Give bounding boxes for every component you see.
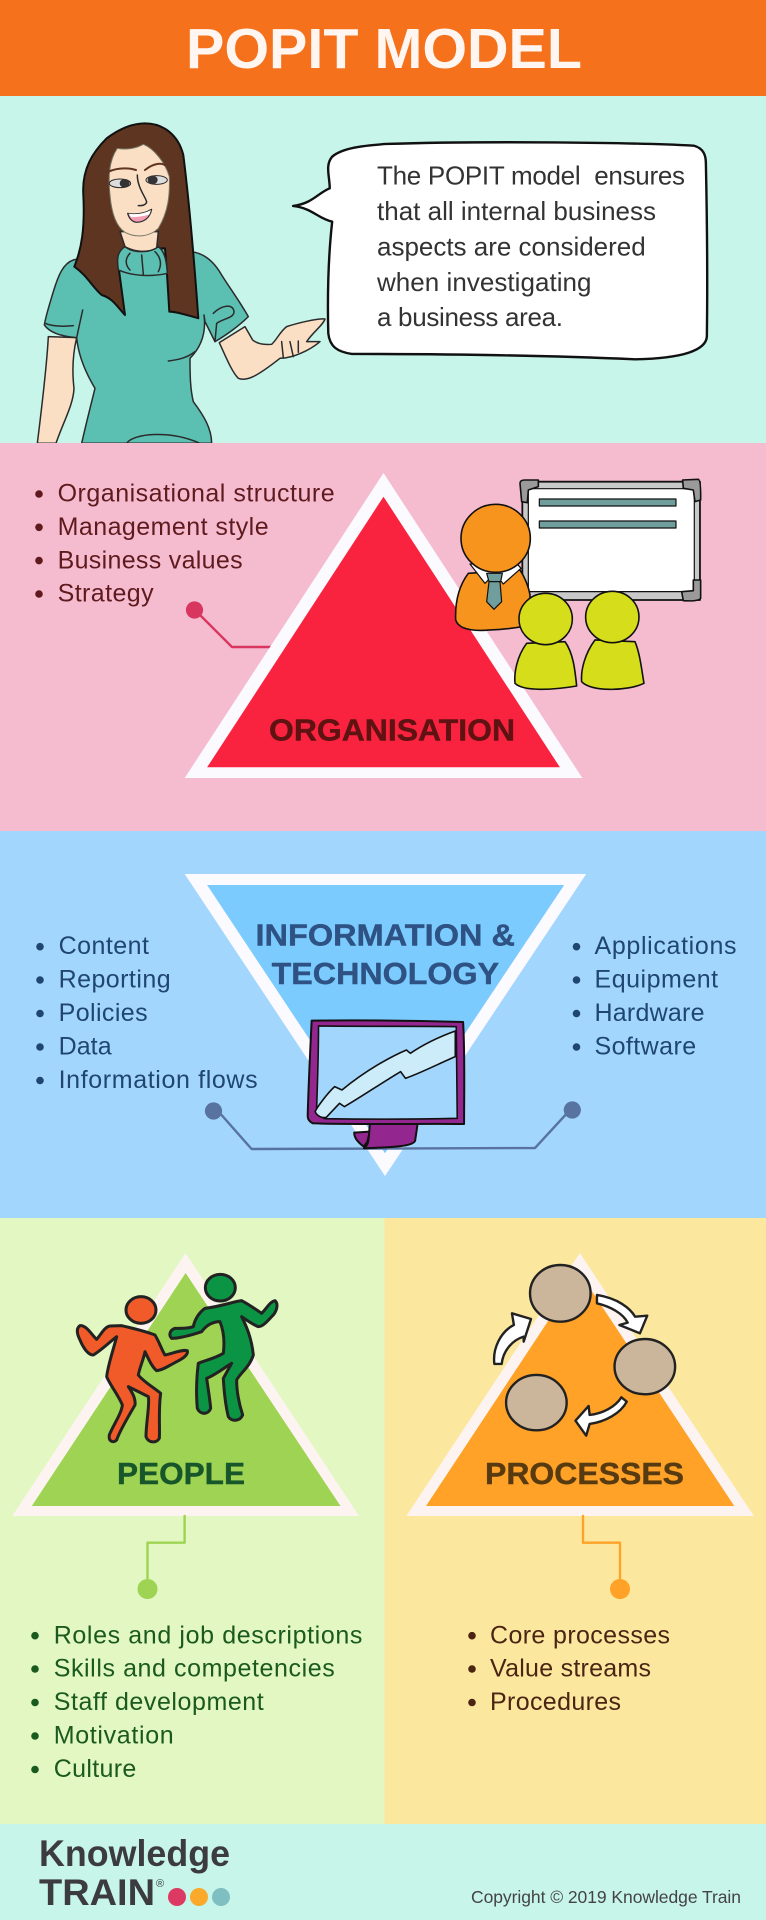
bullet list: information: Data [59, 1032, 112, 1060]
triangle: processes [406, 1253, 754, 1516]
bullet list: information: Content [59, 932, 149, 960]
bullet list: technology: Hardware [594, 999, 704, 1027]
bullet list: people: Culture [54, 1755, 136, 1783]
triangle: organisation [185, 473, 582, 778]
icon: dancing people [77, 1274, 277, 1442]
bullet list: processes: Core processes [490, 1621, 670, 1649]
panel: processes [384, 1218, 766, 1824]
bullet list: technology: Software [594, 1032, 696, 1060]
bullet list: processes: Procedures [490, 1688, 621, 1716]
logo: Knowledge Train [39, 1833, 230, 1913]
speech text: aspects are considered [377, 232, 646, 262]
bullet list: people: Roles and job descriptions [54, 1621, 362, 1649]
bullet list: technology [573, 932, 736, 1060]
title: POPIT MODEL [186, 17, 582, 81]
icon: process cycle [494, 1265, 675, 1436]
connector: processes [583, 1516, 630, 1599]
bullet list: technology: Equipment [594, 966, 718, 994]
connector: information and technology [205, 1101, 581, 1149]
panel: organisation [0, 443, 766, 831]
bullet list: organisation: Strategy [58, 580, 154, 608]
label: organisation: ORGANISATION [269, 713, 515, 748]
bullet list: people: Skills and competencies [54, 1655, 335, 1683]
label: information and technology [256, 919, 515, 991]
panel: information and technology [0, 831, 766, 1218]
triangle: people [12, 1253, 359, 1516]
copyright: Copyright © 2019 Knowledge Train [471, 1887, 741, 1907]
bullet list: information: Reporting [59, 966, 171, 994]
icon: presenter and audience at whiteboard [456, 479, 701, 689]
label: people: PEOPLE [117, 1457, 245, 1491]
speech bubble [293, 142, 707, 359]
panel: header [0, 0, 766, 96]
illustration: presenter woman [37, 123, 325, 443]
logo: Knowledge Train: TRAIN [39, 1872, 155, 1913]
bullet list: processes: Value streams [490, 1655, 651, 1683]
speech text: The POPIT model ensures [377, 160, 685, 190]
label: information and technology: TECHNOLOGY [272, 957, 499, 991]
icon: computer monitor [308, 1020, 464, 1148]
bullet list: information [36, 932, 258, 1094]
panel: introduction [0, 96, 766, 443]
panel: people [0, 1218, 384, 1824]
panel: footer [0, 1824, 766, 1920]
label: information and technology: INFORMATION & [256, 919, 515, 953]
label: processes: PROCESSES [485, 1457, 684, 1491]
speech text [376, 160, 685, 332]
speech text: a business area. [377, 302, 563, 332]
bullet list: organisation [35, 480, 335, 608]
speech text: that all internal business [377, 196, 656, 226]
triangle: information and technology [185, 874, 586, 1176]
bullet list: people: Staff development [54, 1688, 264, 1716]
bullet list: processes [468, 1621, 670, 1716]
bullet list: information: Information flows [59, 1066, 258, 1094]
speech text: when investigating [376, 267, 592, 297]
connector: people [138, 1516, 185, 1599]
bullet list: organisation: Business values [58, 546, 243, 574]
bullet list: organisation: Management style [58, 513, 269, 541]
bullet list: information: Policies [59, 999, 148, 1027]
bullet list: technology: Applications [594, 932, 736, 960]
connector: organisation [186, 601, 272, 647]
bullet list: organisation: Organisational structure [58, 480, 335, 508]
bullet list: people [31, 1621, 362, 1783]
logo: Knowledge Train: ® [156, 1878, 164, 1890]
bullet list: people: Motivation [54, 1722, 174, 1750]
logo: Knowledge Train: Knowledge [39, 1833, 230, 1874]
